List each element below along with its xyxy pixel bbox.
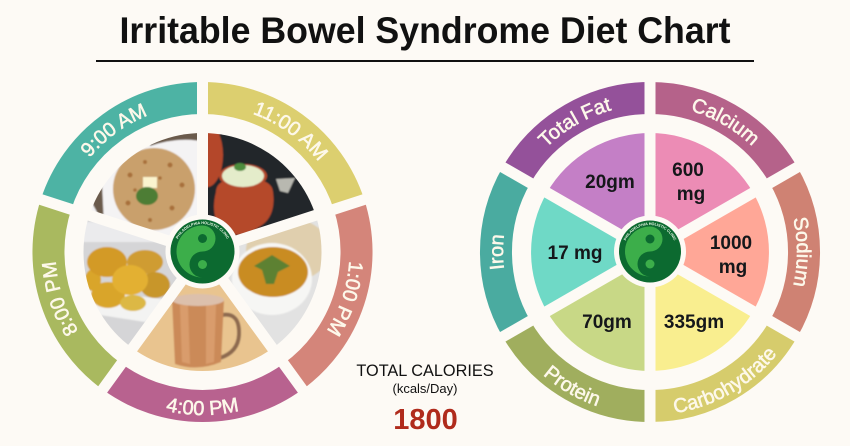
label: 1:00 PM: 1:00 PM	[327, 262, 363, 337]
time labels	[42, 102, 363, 416]
food: paratha	[92, 133, 197, 235]
label: Total Fat: Total Fat	[536, 98, 612, 145]
food: masala tea glass	[137, 284, 268, 371]
spoke gaps	[492, 70, 808, 434]
value: carbohydrate: 335gm	[664, 312, 724, 333]
label: Iron: Iron	[490, 235, 504, 270]
label: Calcium: Calcium	[692, 99, 758, 146]
label: Sodium: Sodium	[793, 218, 812, 286]
label: Protein: Protein	[544, 364, 600, 406]
food: yellow fried snack	[84, 220, 177, 345]
nutrient ring	[496, 98, 804, 406]
value: calcium: 600	[672, 160, 704, 181]
logo: clinic yin-yang: PHILADELPHIA HOLISTIC CLINIC	[624, 222, 676, 240]
total calories callout	[356, 362, 494, 436]
meal time ring	[48, 98, 357, 406]
label: 11:00 AM: 11:00 AM	[254, 102, 328, 161]
callout value: 1800	[393, 404, 458, 436]
label: 8:00 PM: 8:00 PM	[42, 262, 77, 336]
right wheel: nutrients	[480, 82, 820, 422]
value: protein: 70gm	[582, 312, 632, 333]
left wheel: meal times	[32, 82, 372, 422]
logo: clinic yin-yang	[614, 216, 686, 287]
nutrient pie	[531, 133, 769, 371]
nutrient labels	[490, 98, 812, 412]
label: Carbohydrate: Carbohydrate	[674, 349, 776, 412]
title: Irritable Bowel Syndrome Diet Chart	[120, 10, 730, 51]
nutrient values	[548, 160, 752, 333]
value: sodium: 1000	[710, 233, 752, 254]
callout unit: (kcals/Day)	[392, 381, 458, 396]
value: calcium: mg	[677, 184, 705, 205]
food: curd in clay pots	[208, 133, 314, 236]
callout label: TOTAL CALORIES	[356, 362, 494, 380]
title underline	[96, 60, 754, 62]
value: total fat: 20gm	[585, 172, 635, 193]
value: iron: 17 mg	[548, 243, 602, 264]
logo: clinic yin-yang	[166, 215, 240, 288]
spoke gaps	[29, 70, 376, 399]
label: 4:00 PM: 4:00 PM	[166, 397, 238, 416]
logo: clinic yin-yang: PHILADELPHIA HOLISTIC CLINIC	[176, 221, 229, 239]
food: dal with roti	[228, 220, 322, 345]
value: sodium: mg	[719, 257, 747, 278]
label: 9:00 AM: 9:00 AM	[81, 103, 147, 156]
